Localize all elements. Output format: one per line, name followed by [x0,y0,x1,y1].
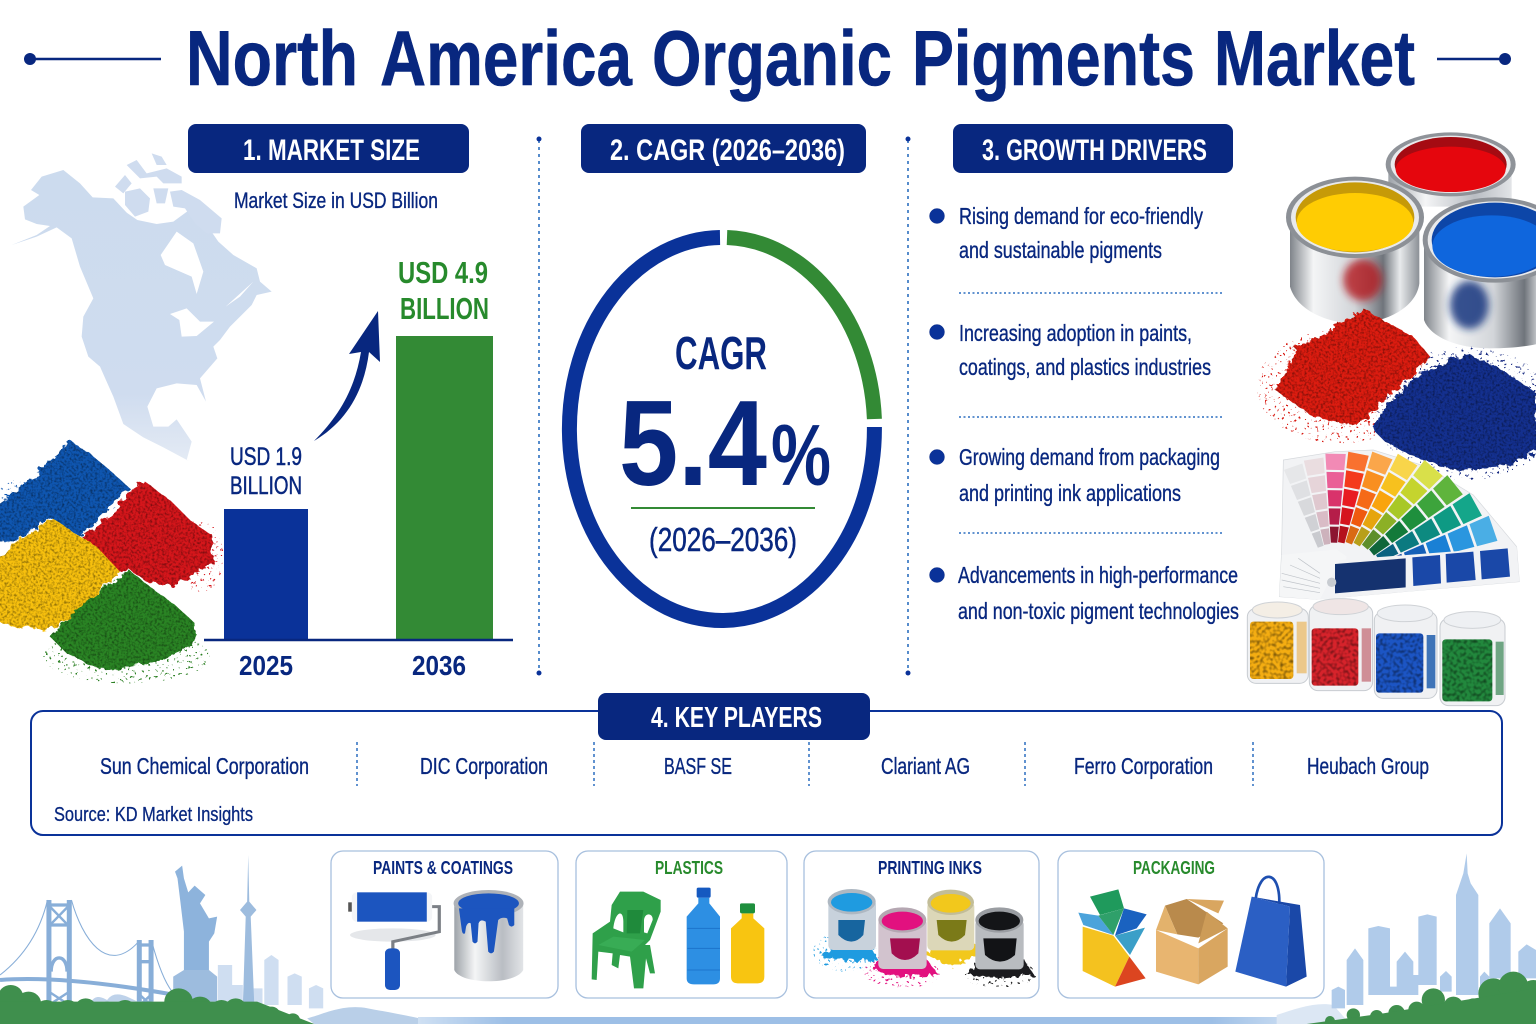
icon: paint cans [1286,132,1536,348]
divider lines [536,136,910,676]
driver 1 [930,203,1203,263]
icon: cardboard box [1156,899,1228,984]
driver 4: and non-toxic pigment technologies [958,598,1239,624]
CAGR value: CAGR [675,327,767,379]
title: North [186,14,358,102]
icon: blue bottle [687,888,720,984]
title: Organic [652,14,892,102]
company names [100,753,1429,779]
icon: pellet jars [1247,599,1505,706]
icon: paint can [454,890,524,981]
title: Pigments [912,14,1195,102]
bar chart: BILLION [230,472,302,500]
driver 3 [930,444,1220,506]
bar chart: 2036 [412,650,466,681]
company names: Sun Chemical Corporation [100,753,309,779]
company names: DIC Corporation [420,753,548,779]
icon: red and blue pigment piles [1257,308,1536,480]
heading: key players [598,693,870,740]
icon: paint roller [348,892,439,990]
CAGR value: % [771,408,831,504]
heading: market size: 1. MARKET SIZE [243,134,420,167]
source note: Source: KD Market Insights [54,804,253,826]
panel: CAGR [569,124,874,620]
heading: CAGR [581,124,866,173]
panel: market size [188,124,513,681]
panel: plastics: PLASTICS [655,858,723,878]
driver 3: Growing demand from packaging [959,444,1220,470]
donut chart [569,238,874,620]
driver 2: coatings, and plastics industries [959,354,1211,380]
heading: key players: 4. KEY PLAYERS [651,702,822,734]
panel: paints and coatings: PAINTS & COATINGS [373,858,513,878]
heading: market size [188,124,469,173]
panel: printing inks: PRINTING INKS [878,858,982,878]
icon: coloured box [1078,889,1147,987]
icon: colour fan deck [1279,450,1519,599]
icon: yellow bottle [731,903,764,983]
icon: chair [592,892,661,988]
panel: packaging [1058,851,1324,998]
panel: plastics [576,851,787,998]
bar chart: USD 4.9 [398,255,488,290]
driver 4 [930,562,1239,624]
CAGR value [619,327,831,558]
icon: ink cans [813,889,1037,988]
title [24,14,1511,102]
driver 2: Increasing adoption in paints, [959,320,1192,346]
bar chart: 2025 [239,650,293,681]
icon: pigment powder piles [0,442,223,683]
panel: paints and coatings [331,851,558,998]
panel: key players [31,693,1502,835]
company names: Ferro Corporation [1074,753,1213,779]
heading: CAGR: 2. CAGR (2026–2036) [610,134,845,167]
company names: Clariant AG [881,753,970,779]
heading: growth drivers: 3. GROWTH DRIVERS [982,134,1207,167]
arrow: growth [314,311,380,441]
panel: packaging: PACKAGING [1133,858,1215,878]
driver 1: Rising demand for eco-friendly [959,203,1203,229]
title: America [380,14,632,102]
driver 1: and sustainable pigments [959,237,1162,263]
skyline left [0,855,420,1024]
chart subtitle: Market Size in USD Billion [234,188,438,213]
title: Market [1214,14,1415,102]
CAGR value: 5.4 [619,375,767,511]
company names: Heubach Group [1307,753,1429,779]
map: North America [12,153,272,468]
water band [418,1017,1300,1024]
skyline right [1277,853,1536,1024]
CAGR value: (2026–2036) [649,521,797,558]
driver 4: Advancements in high-performance [958,562,1238,588]
company names: BASF SE [664,753,732,779]
panel: printing inks [804,851,1039,998]
driver 3: and printing ink applications [959,480,1181,506]
icon: shopping bag [1235,877,1307,987]
heading: growth drivers [953,124,1233,173]
bar chart: USD 1.9 [230,443,302,471]
bar chart [204,255,513,681]
driver 2 [930,320,1211,380]
bar chart: BILLION [400,291,489,326]
panel: growth drivers [930,124,1239,624]
